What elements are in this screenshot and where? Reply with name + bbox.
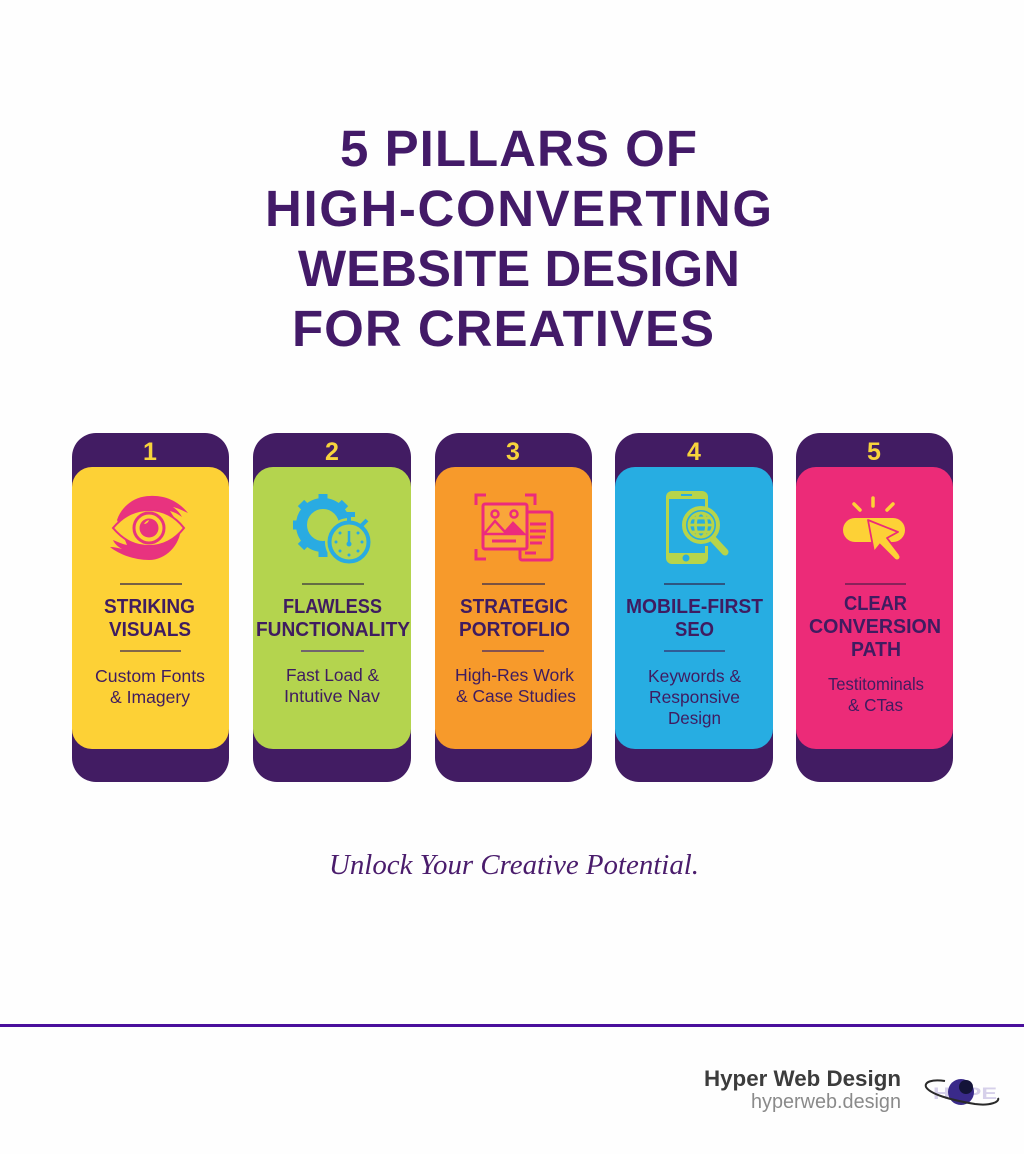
title: HIGH-CONVERTING: [265, 180, 772, 237]
heading: STRIKING: [104, 596, 195, 618]
heading: PATH: [851, 639, 901, 661]
description: Custom Fonts: [95, 666, 205, 686]
panel: pillar 2 flawless functionality: [253, 433, 411, 782]
panel: pillar 4 mobile-first seo: [615, 433, 773, 782]
heading: FLAWLESS: [283, 596, 382, 618]
footer brand: [704, 1066, 901, 1113]
heading: [104, 596, 195, 641]
footer brand: Hyper Web Design: [704, 1066, 901, 1091]
number 2: 2: [325, 438, 339, 466]
description: [648, 666, 741, 728]
description: [455, 665, 576, 706]
icon: eye: [110, 496, 188, 560]
tagline: Unlock Your Creative Potential.: [329, 850, 699, 881]
description: Fast Load &: [286, 665, 379, 685]
title: [265, 120, 772, 357]
title: 5 PILLARS OF: [340, 120, 697, 177]
panel: pillar 3 strategic portfolio: [435, 433, 592, 782]
heading: SEO: [675, 619, 714, 641]
description: [284, 665, 380, 706]
footer brand: hyperweb.design: [751, 1091, 901, 1113]
icon: portfolio image and document: [476, 495, 552, 560]
number 4: 4: [687, 438, 701, 466]
description: Intutive Nav: [284, 686, 380, 706]
heading: MOBILE-FIRST: [626, 596, 763, 618]
description: Responsive: [649, 687, 740, 707]
number 1: 1: [143, 438, 157, 466]
number 5: 5: [867, 438, 881, 466]
heading: CONVERSION: [809, 616, 941, 638]
description: [828, 674, 924, 715]
heading: [626, 596, 763, 641]
heading: STRATEGIC: [460, 596, 568, 618]
title: WEBSITE DESIGN: [298, 240, 740, 297]
heading: FUNCTIONALITY: [256, 619, 411, 641]
description: & Imagery: [110, 687, 190, 707]
number 3: 3: [506, 438, 520, 466]
heading: VISUALS: [109, 619, 191, 641]
icon: gear and stopwatch: [293, 494, 373, 566]
description: Design: [668, 708, 721, 728]
panel: pillar 1 striking visuals: [72, 433, 229, 782]
description: [95, 666, 205, 707]
logo: [926, 1079, 998, 1105]
description: Keywords &: [648, 666, 741, 686]
description: & Case Studies: [456, 686, 576, 706]
title: FOR CREATIVES: [292, 300, 714, 357]
description: & CTas: [848, 695, 903, 715]
panel: pillar 5 clear conversion path: [796, 433, 953, 782]
heading: CLEAR: [844, 593, 908, 615]
icon: phone and magnifier: [666, 491, 725, 564]
description: High-Res Work: [455, 665, 574, 685]
logo: HYPE: [933, 1084, 997, 1103]
heading: [809, 593, 941, 661]
heading: PORTOFLIO: [459, 619, 570, 641]
icon: click button: [843, 498, 905, 559]
heading: [459, 596, 570, 641]
description: Testitominals: [828, 674, 924, 694]
heading: [256, 596, 411, 641]
